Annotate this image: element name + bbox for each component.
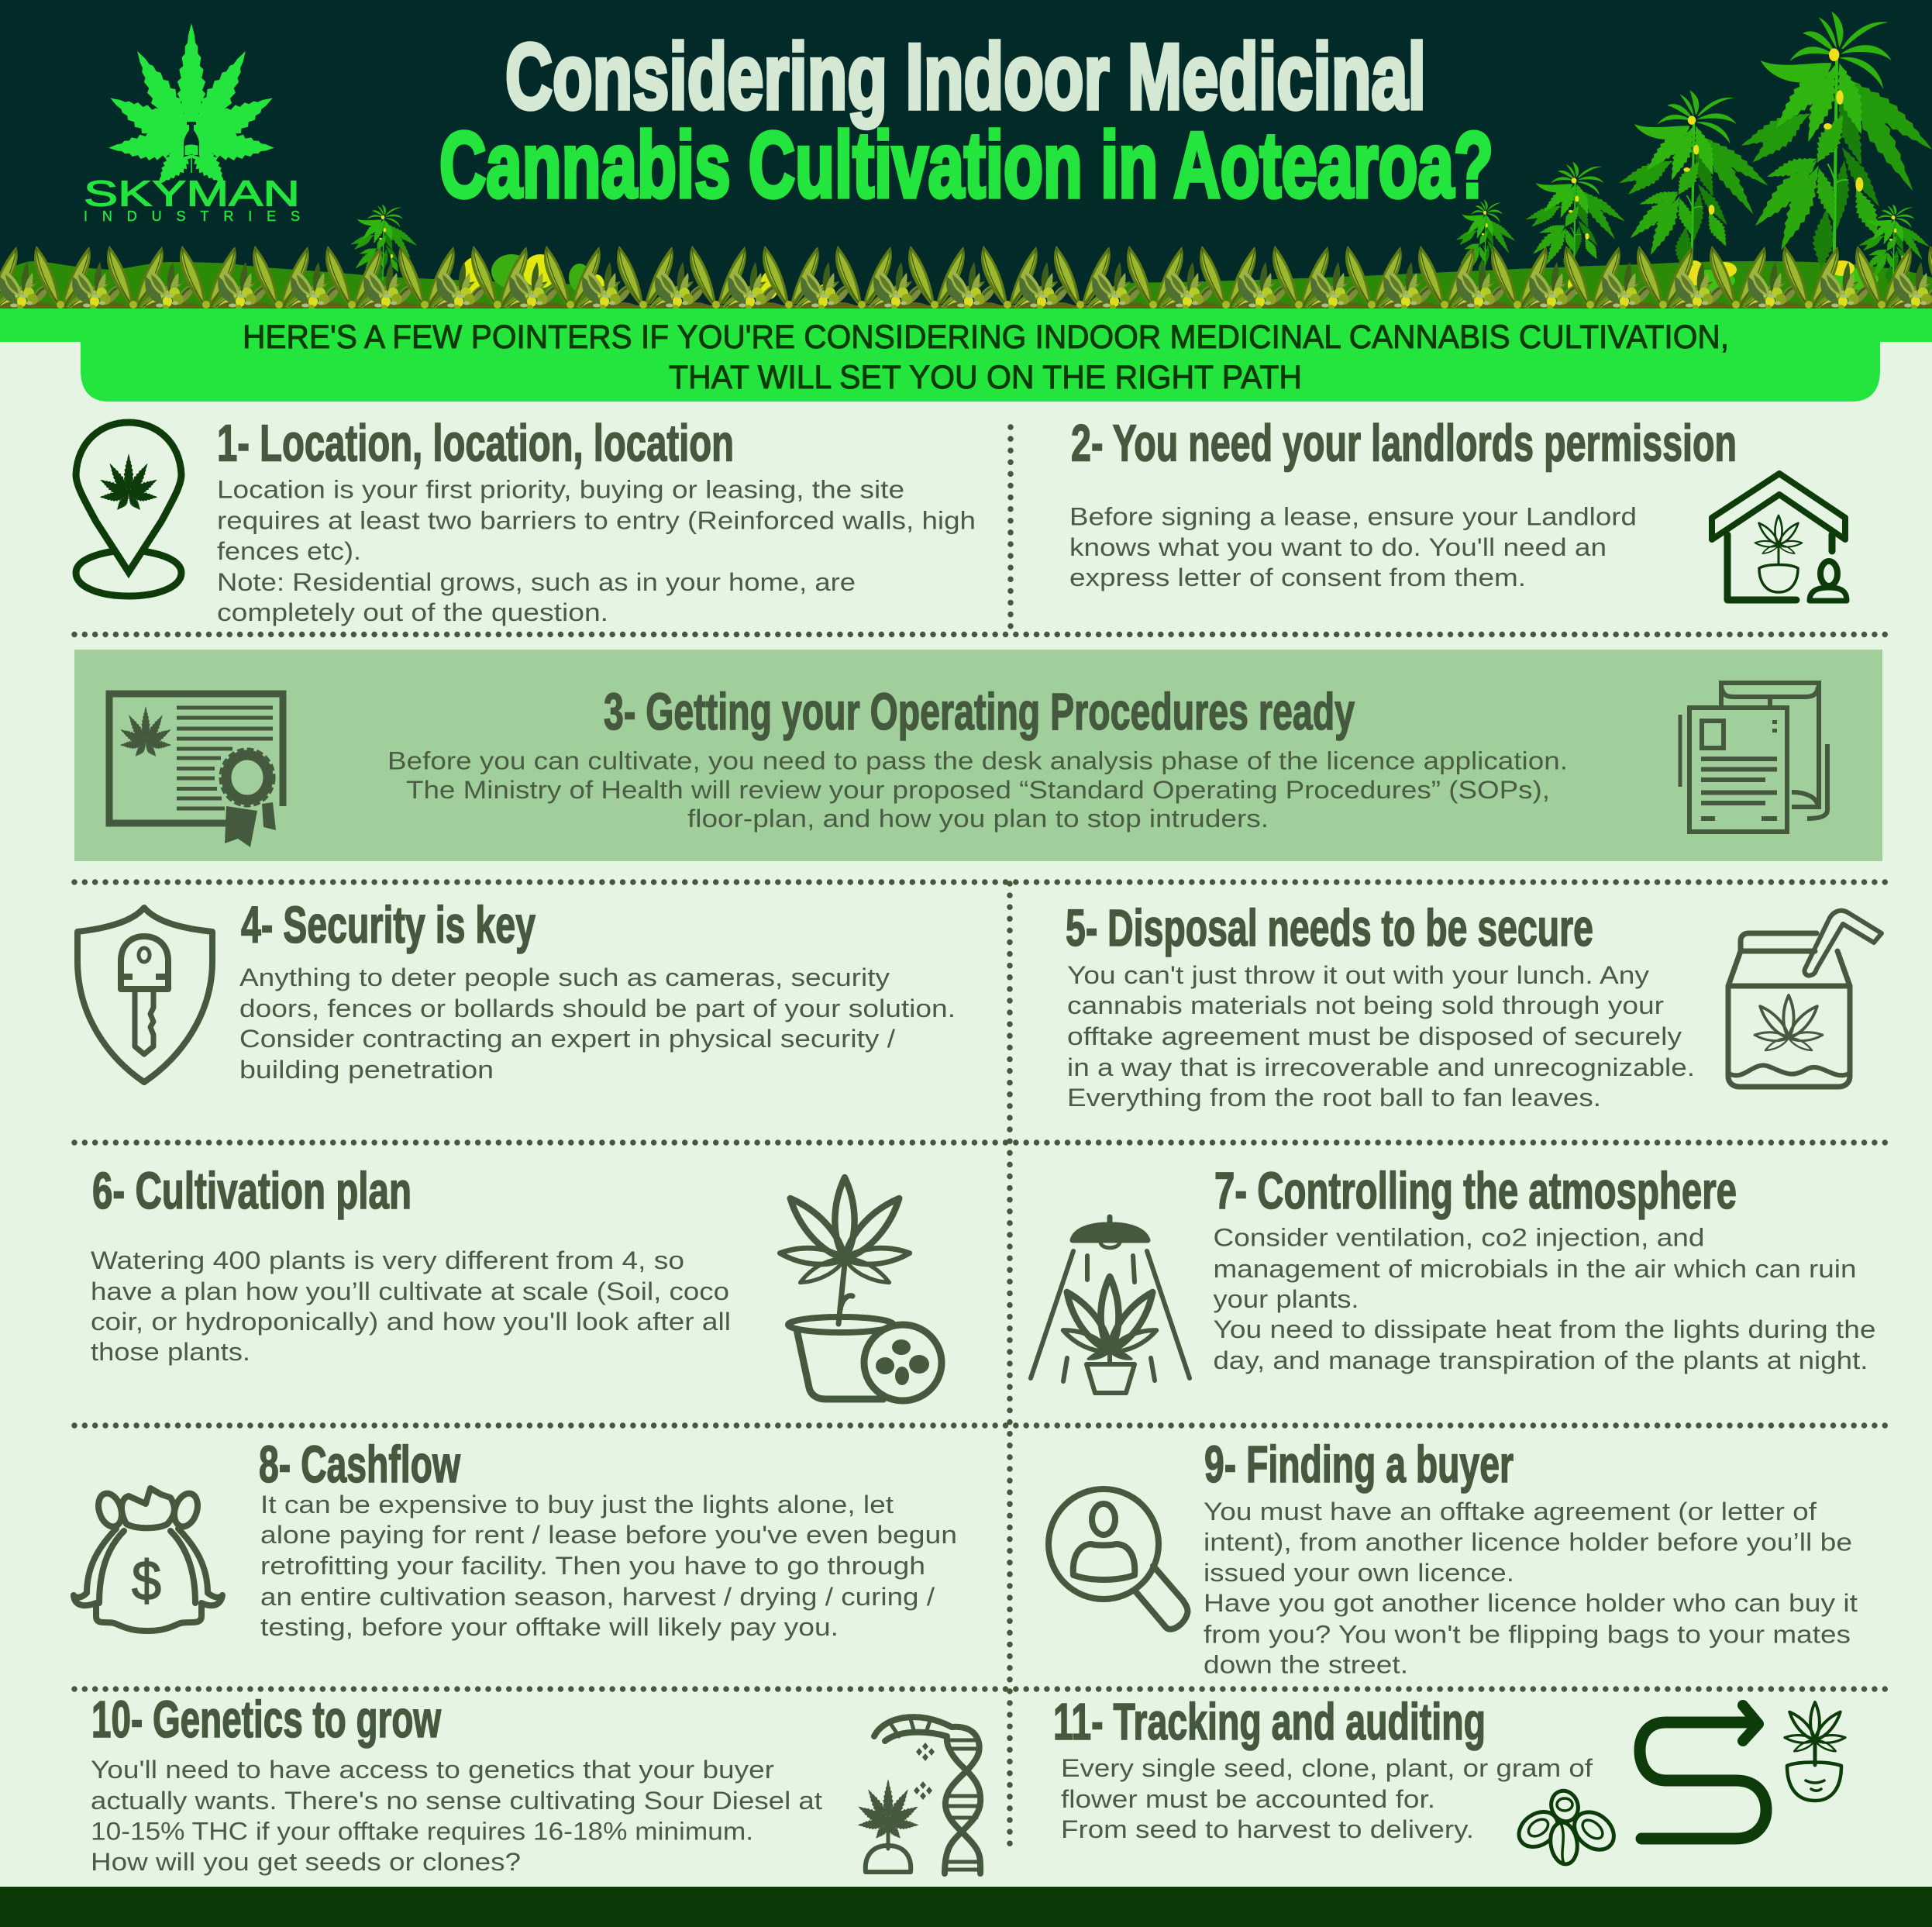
body text: Before signing a lease, ensure your Landlord (1069, 502, 1637, 530)
header banner (0, 0, 1932, 312)
title: Considering Indoor Medicinal (505, 25, 1426, 129)
panel 7: atmosphere (1031, 1162, 1875, 1393)
body text (239, 964, 956, 1084)
body text: Location is your first priority, buying or leasing, the site (217, 476, 904, 504)
logo wordmark: SKYMAN (84, 174, 300, 214)
body text: offtake agreement must be disposed of securely (1067, 1022, 1682, 1050)
body text: cannabis materials not being sold through your (1067, 991, 1664, 1019)
panel 10: genetics (91, 1691, 980, 1876)
body text (217, 476, 976, 626)
body text: Consider contracting an expert in physical security / (239, 1025, 895, 1053)
body text: You need to dissipate heat from the lights during the (1214, 1315, 1875, 1343)
panel 2: landlord permission (1069, 414, 1847, 601)
body text: those plants. (91, 1338, 250, 1366)
body text: doors, fences or bollards should be part of your solution. (239, 995, 956, 1022)
body text: You'll need to have access to genetics that your buyer (91, 1756, 774, 1784)
icon: logo leaf (103, 23, 280, 192)
body text: down the street. (1204, 1651, 1408, 1679)
body text (91, 1756, 822, 1876)
body text (1204, 1498, 1858, 1679)
body text: testing, before your offtake will likely pay you. (260, 1613, 839, 1641)
heading: 9- Finding a buyer (1204, 1436, 1514, 1494)
dollar sign: $ (132, 1550, 161, 1612)
green subtitle banner: HERE'S A FEW POINTERS IF YOU'RE CONSIDERING INDOOR MEDICINAL CANNABIS CULTIVATION, (243, 319, 1729, 356)
body text: management of microbials in the air which can ruin (1214, 1255, 1857, 1283)
body text: Every single seed, clone, plant, or gram of (1061, 1754, 1593, 1782)
body text: From seed to harvest to delivery. (1061, 1815, 1474, 1843)
heading: 6- Cultivation plan (92, 1162, 412, 1220)
panel 3: operating procedures (74, 650, 1882, 861)
body text (260, 1491, 957, 1641)
heading: 7- Controlling the atmosphere (1214, 1162, 1737, 1220)
body text: intent), from another licence holder before you’ll be (1204, 1529, 1852, 1556)
heading: 11- Tracking and auditing (1053, 1693, 1486, 1751)
icon: DNA and plant (856, 1717, 980, 1874)
title: Cannabis Cultivation in Aotearoa? (439, 113, 1493, 217)
icon: certificate (109, 694, 286, 847)
body text: actually wants. There's no sense cultivating Sour Diesel at (91, 1787, 822, 1815)
heading: 10- Genetics to grow (91, 1691, 442, 1749)
body text: Note: Residential grows, such as in your home, are (217, 568, 856, 596)
body text (1061, 1754, 1593, 1843)
icon: magnifier with person (1049, 1489, 1188, 1629)
icon: grow lamp and plant (1031, 1217, 1190, 1393)
icon: seed-to-plant arrow (1512, 1702, 1845, 1866)
icon: money bag (74, 1488, 222, 1631)
logo subtitle: INDUSTRIES (84, 209, 300, 224)
grass border (0, 246, 1932, 312)
panel 4: security (77, 896, 956, 1084)
panel 1: location (76, 414, 976, 626)
icon: carton with straw (1728, 911, 1882, 1087)
body text: floor-plan, and how you plan to stop intruders. (687, 805, 1269, 833)
body text: alone paying for rent / lease before you've even begun (260, 1521, 957, 1549)
footer bar (0, 1887, 1932, 1927)
body text: It can be expensive to buy just the lights alone, let (260, 1491, 894, 1519)
body text: Before you can cultivate, you need to pass the desk analysis phase of the licence application. (387, 747, 1568, 775)
heading: 4- Security is key (241, 896, 536, 954)
panel 5: disposal (1066, 899, 1882, 1112)
icon: map pin (76, 422, 181, 596)
body text: your plants. (1214, 1285, 1359, 1313)
body text: building penetration (239, 1056, 494, 1084)
body text: day, and manage transpiration of the plants at night. (1214, 1346, 1868, 1374)
hills (0, 261, 1932, 309)
body text: fences etc). (217, 537, 361, 565)
body text: You must have an offtake agreement (or letter of (1204, 1498, 1817, 1525)
body text: have a plan how you’ll cultivate at scale (Soil, coco (91, 1277, 729, 1305)
body text (387, 747, 1568, 833)
body text: an entire cultivation season, harvest / drying / curing / (260, 1583, 935, 1611)
body text: from you? You won't be flipping bags to your mates (1204, 1620, 1851, 1648)
title (439, 25, 1493, 217)
heading: 3- Getting your Operating Procedures ready (604, 683, 1355, 741)
panel 6: cultivation plan (91, 1162, 942, 1401)
body text: retrofitting your facility. Then you have to go through (260, 1552, 925, 1580)
body text: 10-15% THC if your offtake requires 16-18% minimum. (91, 1817, 753, 1845)
panel 11: tracking (1053, 1693, 1845, 1866)
panel 8: cashflow (74, 1436, 957, 1641)
plants (349, 12, 1932, 284)
body text: You can't just throw it out with your lunch. Any (1067, 961, 1649, 989)
body text: The Ministry of Health will review your proposed “Standard Operating Procedures” (SOPs), (406, 776, 1550, 804)
body text (1067, 961, 1695, 1112)
heading: 8- Cashflow (259, 1436, 461, 1494)
body text: Have you got another licence holder who can buy it (1204, 1589, 1858, 1617)
body text: How will you get seeds or clones? (91, 1848, 521, 1876)
body text (1069, 502, 1637, 591)
heading: 1- Location, location, location (217, 414, 734, 473)
body text: completely out of the question. (217, 598, 608, 626)
body text: express letter of consent from them. (1069, 564, 1526, 591)
body text: in a way that is irrecoverable and unrecognizable. (1067, 1053, 1695, 1081)
body text (1214, 1223, 1875, 1374)
green subtitle banner (0, 309, 1932, 402)
panel 9: finding a buyer (1049, 1436, 1858, 1679)
body text: knows what you want to do. You'll need an (1069, 533, 1607, 561)
yellow flowers (460, 254, 1879, 299)
body text: requires at least two barriers to entry (Reinforced walls, high (217, 507, 976, 535)
body text: Watering 400 plants is very different from 4, so (91, 1246, 684, 1274)
green subtitle banner: THAT WILL SET YOU ON THE RIGHT PATH (669, 359, 1302, 396)
body text: flower must be accounted for. (1061, 1785, 1435, 1813)
body text (91, 1246, 731, 1366)
body text: Everything from the root ball to fan leaves. (1067, 1084, 1601, 1112)
icon: documents (1680, 683, 1827, 832)
body text: Anything to deter people such as cameras, security (239, 964, 890, 991)
icon: house with plant and person (1712, 474, 1847, 601)
icon: potted plant with coco (779, 1177, 942, 1401)
body text: issued your own licence. (1204, 1559, 1514, 1587)
body text: coir, or hydroponically) and how you'll look after all (91, 1308, 731, 1336)
icon: shield with key (77, 908, 212, 1082)
body text: Consider ventilation, co2 injection, and (1214, 1223, 1705, 1251)
logo: Skyman Industries (84, 23, 300, 224)
heading: 5- Disposal needs to be secure (1066, 899, 1593, 957)
